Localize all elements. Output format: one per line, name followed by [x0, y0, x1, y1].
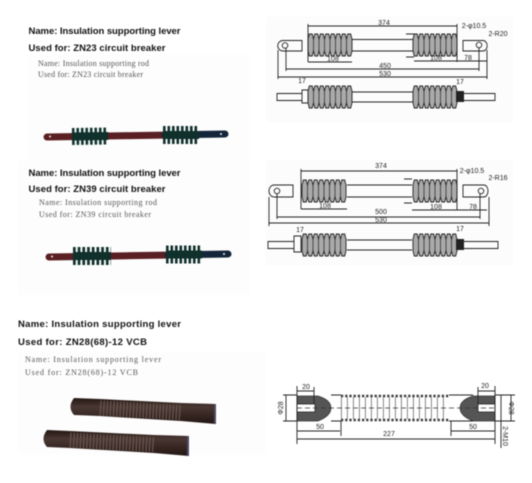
dimension lines — [278, 24, 487, 79]
side view — [268, 234, 498, 256]
dimension labels: 108 — [319, 203, 331, 210]
dimension labels: 78 — [469, 204, 477, 211]
photo caption: ZN28: Name: Insulation supporting lever — [25, 355, 161, 364]
right threaded hole — [478, 404, 495, 412]
dimension labels: 20 — [481, 383, 489, 390]
heading: ZN39: Name: Insulation supporting lever — [28, 168, 181, 179]
photo: ZN39 lever — [49, 253, 228, 258]
dimension labels: 2-M10 — [501, 426, 508, 446]
heading: ZN28: Used for: ZN28(68)-12 VCB — [18, 337, 147, 348]
photo caption: ZN23: Used for: ZN23 circuit breaker — [38, 70, 143, 79]
dimension labels: 50 — [469, 424, 477, 431]
dimension labels: 50 — [316, 424, 324, 431]
top view — [278, 34, 487, 56]
drawing: ZN23 dimensions — [277, 20, 508, 108]
photo: upper threaded lever — [70, 398, 216, 424]
side view — [277, 86, 495, 108]
heading: ZN28: Name: Insulation supporting lever — [18, 319, 181, 330]
dimension labels: 2-R16 — [488, 175, 508, 182]
dimension labels: 374 — [375, 163, 387, 170]
photo caption: ZN28 — [25, 355, 161, 377]
drawing: ZN28 dimensions — [278, 383, 515, 448]
dimension labels — [296, 163, 508, 234]
photo caption: ZN39 — [39, 198, 157, 219]
dimension labels: 2-φ10.5 — [462, 23, 486, 30]
photo caption: ZN23 — [38, 59, 149, 79]
drawing: ZN39 dimensions — [268, 163, 508, 256]
dimension labels: 20 — [302, 384, 310, 391]
heading: ZN28 — [18, 319, 181, 348]
heading: ZN23: Name: Insulation supporting lever — [28, 26, 181, 37]
dimension labels: 108 — [327, 56, 339, 63]
dimension labels — [298, 20, 508, 86]
heading: ZN39: Used for: ZN39 circuit breaker — [28, 184, 166, 195]
photo caption: ZN39: Used for: ZN39 circuit breaker — [39, 210, 151, 219]
dimension labels: 2-R20 — [488, 31, 508, 38]
dimension labels: 374 — [378, 20, 390, 27]
dimension labels: 530 — [379, 71, 391, 78]
heading: ZN23: Used for: ZN23 circuit breaker — [28, 43, 166, 54]
dimension lines — [269, 169, 489, 226]
dimension labels: Φ28 — [278, 401, 285, 415]
heading: ZN39 — [28, 168, 181, 195]
dimension labels: 2-φ10.5 — [460, 168, 484, 175]
panel: ZN28 photo background — [18, 352, 266, 454]
panel: ZN39 drawing background — [266, 160, 513, 265]
photo caption: ZN23: Name: Insulation supporting rod — [38, 59, 149, 68]
dimension labels: 500 — [375, 209, 387, 216]
photo caption: ZN39: Name: Insulation supporting rod — [39, 198, 157, 207]
panel: ZN39 photo background — [18, 160, 250, 295]
dimension labels: 108 — [430, 55, 442, 62]
dimension labels: 17 — [298, 78, 306, 85]
right hatched end — [460, 396, 495, 421]
photo: ZN23 lever — [47, 133, 225, 138]
dimension labels: 17 — [456, 79, 464, 86]
dimension labels: 227 — [383, 431, 395, 438]
panel: ZN23 drawing background — [266, 17, 513, 122]
photo caption: ZN28: Used for: ZN28(68)-12 VCB — [25, 368, 138, 377]
left threaded hole — [297, 404, 315, 412]
dimension lines — [283, 386, 515, 448]
dimension labels: 108 — [430, 204, 442, 211]
dimension labels: 17 — [296, 227, 304, 234]
panel: ZN23 photo background — [28, 54, 249, 160]
heading: ZN23 — [28, 26, 181, 54]
dimension labels: 17 — [456, 226, 464, 233]
top view — [269, 180, 488, 202]
bellows — [297, 395, 495, 421]
dimension labels: 78 — [464, 55, 472, 62]
left hatched end — [297, 396, 331, 421]
dimension labels: 450 — [379, 63, 391, 70]
dimension labels: Φ28 — [507, 401, 514, 415]
photo: lower threaded lever — [44, 430, 189, 456]
dimension labels: 530 — [375, 217, 387, 224]
dimension labels — [278, 383, 514, 446]
